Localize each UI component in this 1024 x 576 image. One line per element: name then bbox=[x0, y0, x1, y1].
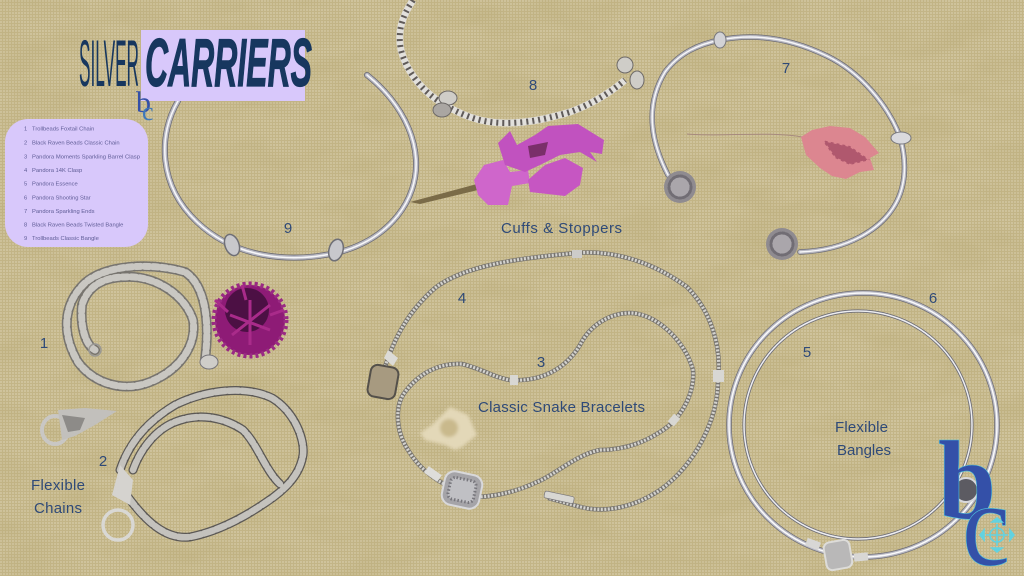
heading: Classic Snake Bracelets: Classic Snake Bracelets bbox=[478, 399, 645, 416]
legend panel: Black Raven Beads Twisted Bangle bbox=[32, 223, 123, 229]
chain 1: foxtail chain bbox=[67, 266, 218, 386]
large bc logo bbox=[938, 419, 1014, 576]
legend panel: 5 bbox=[24, 182, 27, 188]
legend panel: Pandora Essence bbox=[32, 182, 78, 188]
legend panel: Pandora Shooting Star bbox=[32, 195, 91, 201]
item numbers: 1 bbox=[40, 335, 48, 352]
heading: Flexible Bangles bbox=[835, 419, 891, 459]
legend panel: Trollbeads Classic Bangle bbox=[32, 236, 99, 242]
heading: Flexible Chains bbox=[31, 477, 85, 517]
small bc logo: c bbox=[142, 97, 154, 126]
legend panel: Pandora Sparkling Ends bbox=[32, 209, 95, 215]
flower: dried pink grass bbox=[687, 126, 879, 179]
heading: Flexible Bangles: Flexible bbox=[835, 419, 888, 436]
item numbers: 6 bbox=[929, 290, 937, 307]
item numbers: 8 bbox=[529, 77, 537, 94]
flower: purple globe amaranth bbox=[214, 284, 286, 356]
bangle 6: shooting star bbox=[729, 293, 997, 557]
legend panel: Pandora Moments Sparkling Barrel Clasp bbox=[32, 154, 140, 160]
item numbers: 9 bbox=[284, 220, 292, 237]
bangle 8: twisted bangle with stoppers bbox=[400, 0, 644, 123]
icon: snowflake emblem bbox=[980, 518, 1014, 552]
title: Silver Carriers: SILVER bbox=[79, 26, 139, 100]
item numbers: 5 bbox=[803, 344, 811, 361]
legend panel: Trollbeads Foxtail Chain bbox=[32, 126, 94, 132]
item numbers: 3 bbox=[537, 354, 545, 371]
bangle 9: classic cuff bbox=[165, 75, 416, 262]
bracelet 4: snake chain bbox=[366, 250, 724, 509]
item numbers: 7 bbox=[782, 60, 790, 77]
flower: cream dried flower bbox=[420, 407, 477, 450]
chain 2: classic chain bbox=[103, 391, 303, 540]
legend panel: 4 bbox=[24, 168, 28, 174]
clasp: lobster clasp bbox=[42, 408, 117, 444]
item numbers: 4 bbox=[458, 290, 466, 307]
small bc logo: b bbox=[136, 86, 151, 119]
item numbers bbox=[40, 60, 937, 470]
text: CARRIERS bbox=[145, 25, 312, 101]
legend panel: 1 bbox=[24, 126, 27, 132]
heading: Cuffs & Stoppers: Cuffs & Stoppers bbox=[501, 220, 622, 237]
bangle 7: sparkling ends bbox=[652, 32, 911, 260]
legend panel bbox=[5, 119, 148, 247]
heading: Flexible Chains: Chains bbox=[34, 500, 82, 517]
large bc logo: b bbox=[938, 419, 996, 543]
legend panel: 8 bbox=[24, 223, 27, 229]
legend panel: 7 bbox=[24, 209, 27, 215]
legend panel: 3 bbox=[24, 154, 27, 160]
flower: magenta statice bbox=[410, 124, 604, 205]
bangle 5: essence bbox=[744, 311, 978, 571]
bracelet 3: snake chain bbox=[398, 313, 693, 511]
heading: Flexible Chains: Flexible bbox=[31, 477, 85, 494]
item numbers: 2 bbox=[99, 453, 107, 470]
legend panel: 9 bbox=[24, 236, 27, 242]
legend panel: 2 bbox=[24, 140, 27, 146]
legend panel: 6 bbox=[24, 195, 27, 201]
title panel bbox=[141, 30, 305, 101]
legend panel: Black Raven Beads Classic Chain bbox=[32, 140, 120, 146]
legend panel: Pandora 14K Clasp bbox=[32, 168, 82, 174]
heading: Flexible Bangles: Bangles bbox=[837, 442, 891, 459]
